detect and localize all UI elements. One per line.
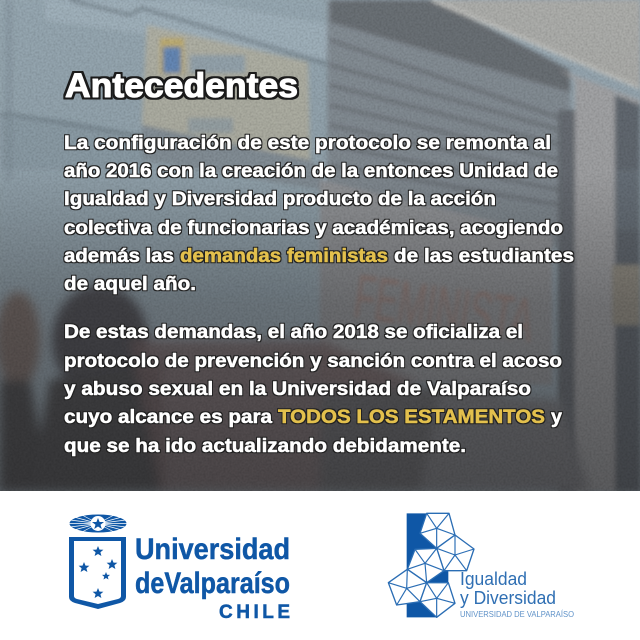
paragraph 1: además las [64,245,174,267]
paragraph 1 [64,132,574,295]
paragraph 1: La configuración de este protocolo se remonta al [64,132,551,154]
title: Antecedentes [65,67,298,105]
paragraph 1: demandas feministas [180,245,388,267]
icon: shield with stars [69,537,126,609]
paragraph 2: TODOS LOS ESTAMENTOS [278,406,545,428]
wordmark: deValparaíso [135,567,290,600]
paragraph 2: que se ha ido actualizando debidamente. [64,435,466,457]
wordmark [460,569,574,619]
logo: Universidad de Valparaíso [69,514,290,623]
wordmark: UNIVERSIDAD DE VALPARAÍSO [460,610,574,619]
paragraph 1: Igualdad y Diversidad producto de la acción [64,188,496,210]
paragraph 1: año 2016 con la creación de la entonces Unidad de [64,160,558,182]
paragraph 2: y [551,406,562,428]
icon: network of pentagons [388,513,474,617]
wordmark: y Diversidad [460,588,556,608]
background photo [0,0,640,491]
paragraph 1: de aquel año. [64,273,196,295]
paragraph 2: cuyo alcance es para [64,406,272,428]
paragraph 1: colectiva de funcionarias y académicas, acogiendo [64,217,563,239]
paragraph 2: protocolo de prevención y sanción contra el acoso [64,350,562,372]
paragraph 1: de las estudiantes [394,245,574,267]
logo: Igualdad y Diversidad [388,513,574,619]
paragraph 2: y abuso sexual en la Universidad de Valparaíso [64,378,531,400]
wordmark: Igualdad [460,569,527,589]
wordmark: CHILE [219,602,290,623]
wordmark: Universidad [135,533,290,566]
paragraph 2 [64,321,562,457]
paragraph 2: De estas demandas, el año 2018 se oficializa el [64,321,523,343]
icon: sun halo with star [69,514,127,532]
wordmark [135,533,290,623]
